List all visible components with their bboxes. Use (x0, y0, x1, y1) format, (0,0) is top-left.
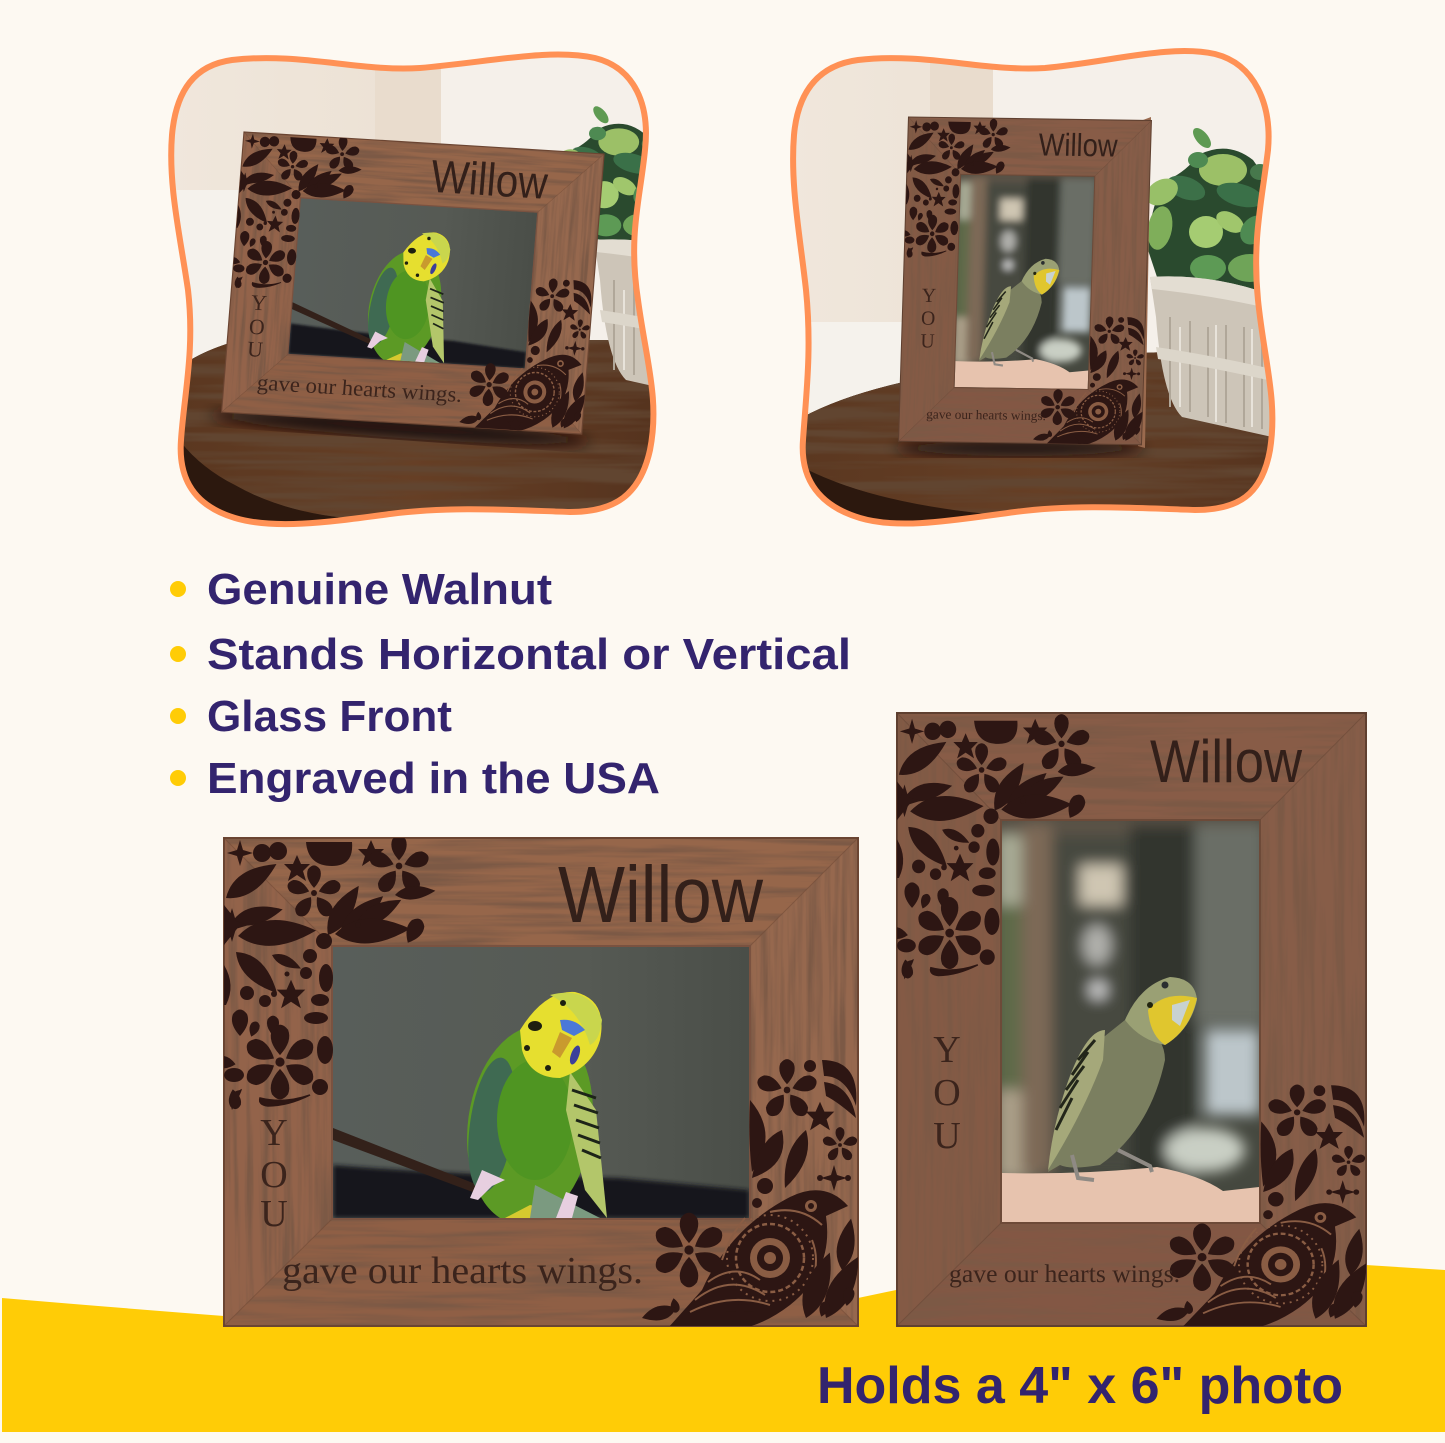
large vertical frame: Y (933, 1029, 961, 1071)
large horizontal frame: Y (260, 1112, 288, 1154)
photo panel: vertical frame on table: Willow (1038, 127, 1118, 164)
feature bullet list: Genuine Walnut (207, 565, 552, 614)
yellow ground band (2, 1265, 1445, 1432)
large horizontal frame: Willow (558, 850, 763, 939)
large vertical frame: gave our hearts wings. (949, 1261, 1180, 1288)
photo panel: horizontal frame on table (168, 52, 656, 528)
photo panel: vertical frame on table: Y (921, 285, 936, 307)
photo size caption: Holds a 4" x 6" photo (817, 1357, 1343, 1415)
photo panel: vertical frame on table: gave our hearts wings. (926, 406, 1046, 423)
photo panel: vertical frame on table: U (920, 330, 935, 353)
large vertical frame: U (933, 1115, 961, 1157)
feature bullet list: Engraved in the USA (207, 754, 660, 803)
large vertical frame: Willow (1150, 728, 1303, 795)
large horizontal frame: gave our hearts wings. (282, 1250, 643, 1292)
large horizontal frame: U (260, 1193, 288, 1235)
photo panel: vertical frame on table (785, 45, 1300, 540)
large horizontal frame (215, 835, 868, 1330)
large horizontal frame: O (260, 1154, 288, 1196)
feature bullet list: Glass Front (207, 692, 452, 741)
large vertical frame (888, 713, 1376, 1330)
photo panel: horizontal frame on table: Willow (429, 151, 550, 209)
photo panel: vertical frame on table: O (921, 307, 936, 330)
photo panel: horizontal frame on table: gave our hearts wings. (256, 370, 463, 407)
large vertical frame: O (933, 1072, 961, 1114)
photo panel: horizontal frame on table: U (246, 337, 264, 362)
photo panel: horizontal frame on table: Y (250, 290, 268, 315)
feature bullet list: Stands Horizontal or Vertical (207, 630, 851, 679)
feature bullet list (170, 565, 851, 803)
photo panel: horizontal frame on table: O (248, 315, 266, 340)
